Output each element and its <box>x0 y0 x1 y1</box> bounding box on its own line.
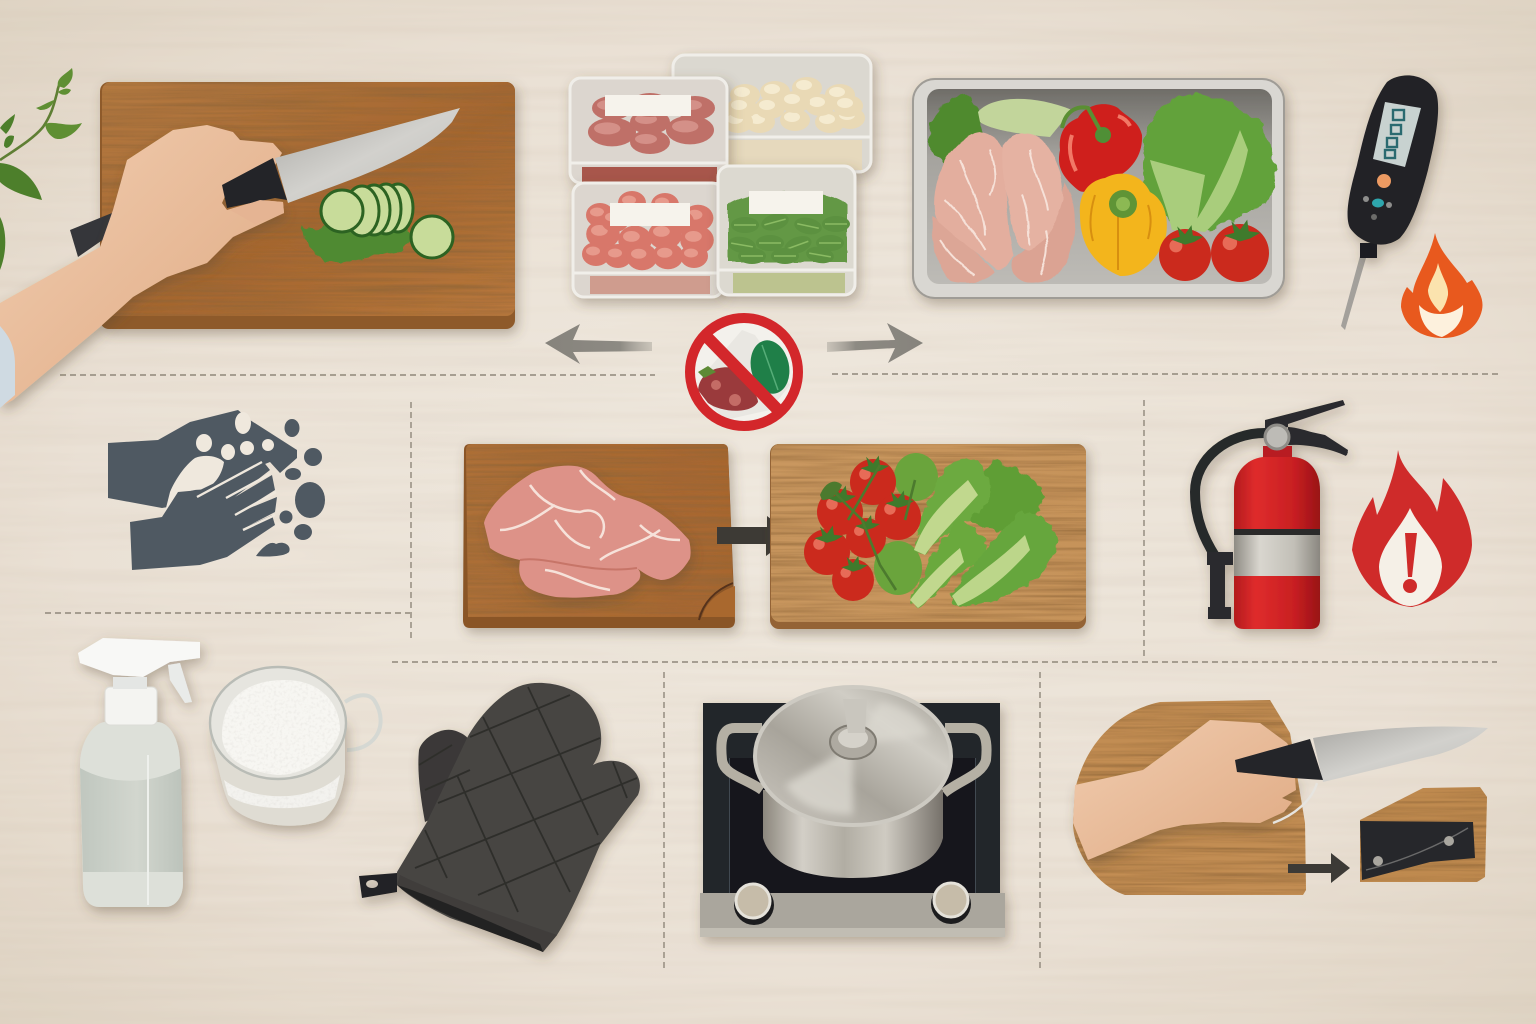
arrow: right <box>827 323 923 363</box>
panel: fire extinguisher with warning <box>1195 400 1472 629</box>
lettuce on board <box>910 459 1058 608</box>
knife handle <box>1235 739 1323 780</box>
cuff <box>397 875 557 952</box>
cucumber wedge <box>978 99 1072 137</box>
red bell pepper <box>1059 104 1142 192</box>
container: sliced meat <box>570 78 727 183</box>
thumb lobe behind <box>418 730 472 822</box>
knife handle <box>222 158 287 208</box>
screen <box>1373 102 1421 167</box>
green leaves under cucumber <box>302 222 412 262</box>
panel: labelled food storage containers <box>570 55 871 297</box>
plant sprig <box>0 68 82 270</box>
knife butt <box>70 213 114 257</box>
tomatoes on tray <box>1159 220 1269 282</box>
green leafy balls <box>874 453 938 595</box>
spray bottle <box>78 638 200 907</box>
panel: spray bottle and baking soda <box>78 638 381 907</box>
fire extinguisher <box>1195 400 1348 629</box>
label <box>610 203 690 226</box>
shirt cuff <box>0 326 15 408</box>
hand holding knife <box>1073 720 1296 860</box>
panel: cutting vegetables on wood board <box>0 82 515 408</box>
tomato cluster <box>804 456 921 601</box>
cutting board <box>100 82 515 329</box>
container: cauliflower <box>673 55 871 172</box>
guide curve <box>1273 783 1317 823</box>
quilt lines <box>415 687 637 912</box>
raw chicken <box>932 132 1075 283</box>
large lettuce <box>1142 94 1276 232</box>
knife blade <box>1313 726 1488 782</box>
panel: separate cutting boards <box>463 444 1086 629</box>
container: ground meat <box>573 183 723 297</box>
icon: hand washing <box>108 410 325 570</box>
pot lid <box>755 687 951 825</box>
tray <box>913 79 1284 298</box>
thermometer body <box>1348 75 1438 258</box>
icon: no cross-contamination sign <box>690 318 798 426</box>
panel: steel tray with meat and vegetables <box>913 79 1284 298</box>
measuring cup of baking soda <box>210 667 381 826</box>
vegetable board <box>770 444 1086 629</box>
small board <box>1360 787 1487 882</box>
label <box>605 95 691 116</box>
probe <box>1341 256 1366 330</box>
icon: fire warning <box>1352 450 1472 607</box>
panel: knife handling and sheath <box>1073 700 1488 895</box>
arrow between boards <box>717 516 793 556</box>
icon: quilted oven mitt <box>359 683 640 952</box>
meat board <box>463 444 735 628</box>
knife blade <box>275 108 460 203</box>
dashed dividers <box>45 374 1498 968</box>
pot handles <box>721 728 987 793</box>
label <box>749 191 823 214</box>
raw steak <box>484 466 691 598</box>
knobs <box>734 883 971 925</box>
meat on plate <box>698 366 758 411</box>
leather sheath <box>1360 821 1475 880</box>
panel: pot on stovetop <box>700 687 1005 937</box>
pot body <box>763 790 943 878</box>
hand <box>0 125 284 407</box>
yellow bell pepper <box>1080 174 1167 276</box>
thumb tip <box>230 200 284 224</box>
leaf <box>746 337 794 397</box>
container: leafy greens <box>718 166 855 295</box>
hanging loop <box>359 873 397 898</box>
arrow: left <box>545 324 652 364</box>
arrow to sheath <box>1288 853 1350 883</box>
icon: orange flame <box>1401 233 1483 338</box>
mitt body <box>397 683 640 952</box>
cucumber slices <box>321 184 453 258</box>
stovetop <box>700 703 1005 937</box>
curved wooden board <box>1073 700 1306 895</box>
panel: meat thermometer with flame <box>1341 75 1483 338</box>
small lettuce <box>929 94 982 166</box>
